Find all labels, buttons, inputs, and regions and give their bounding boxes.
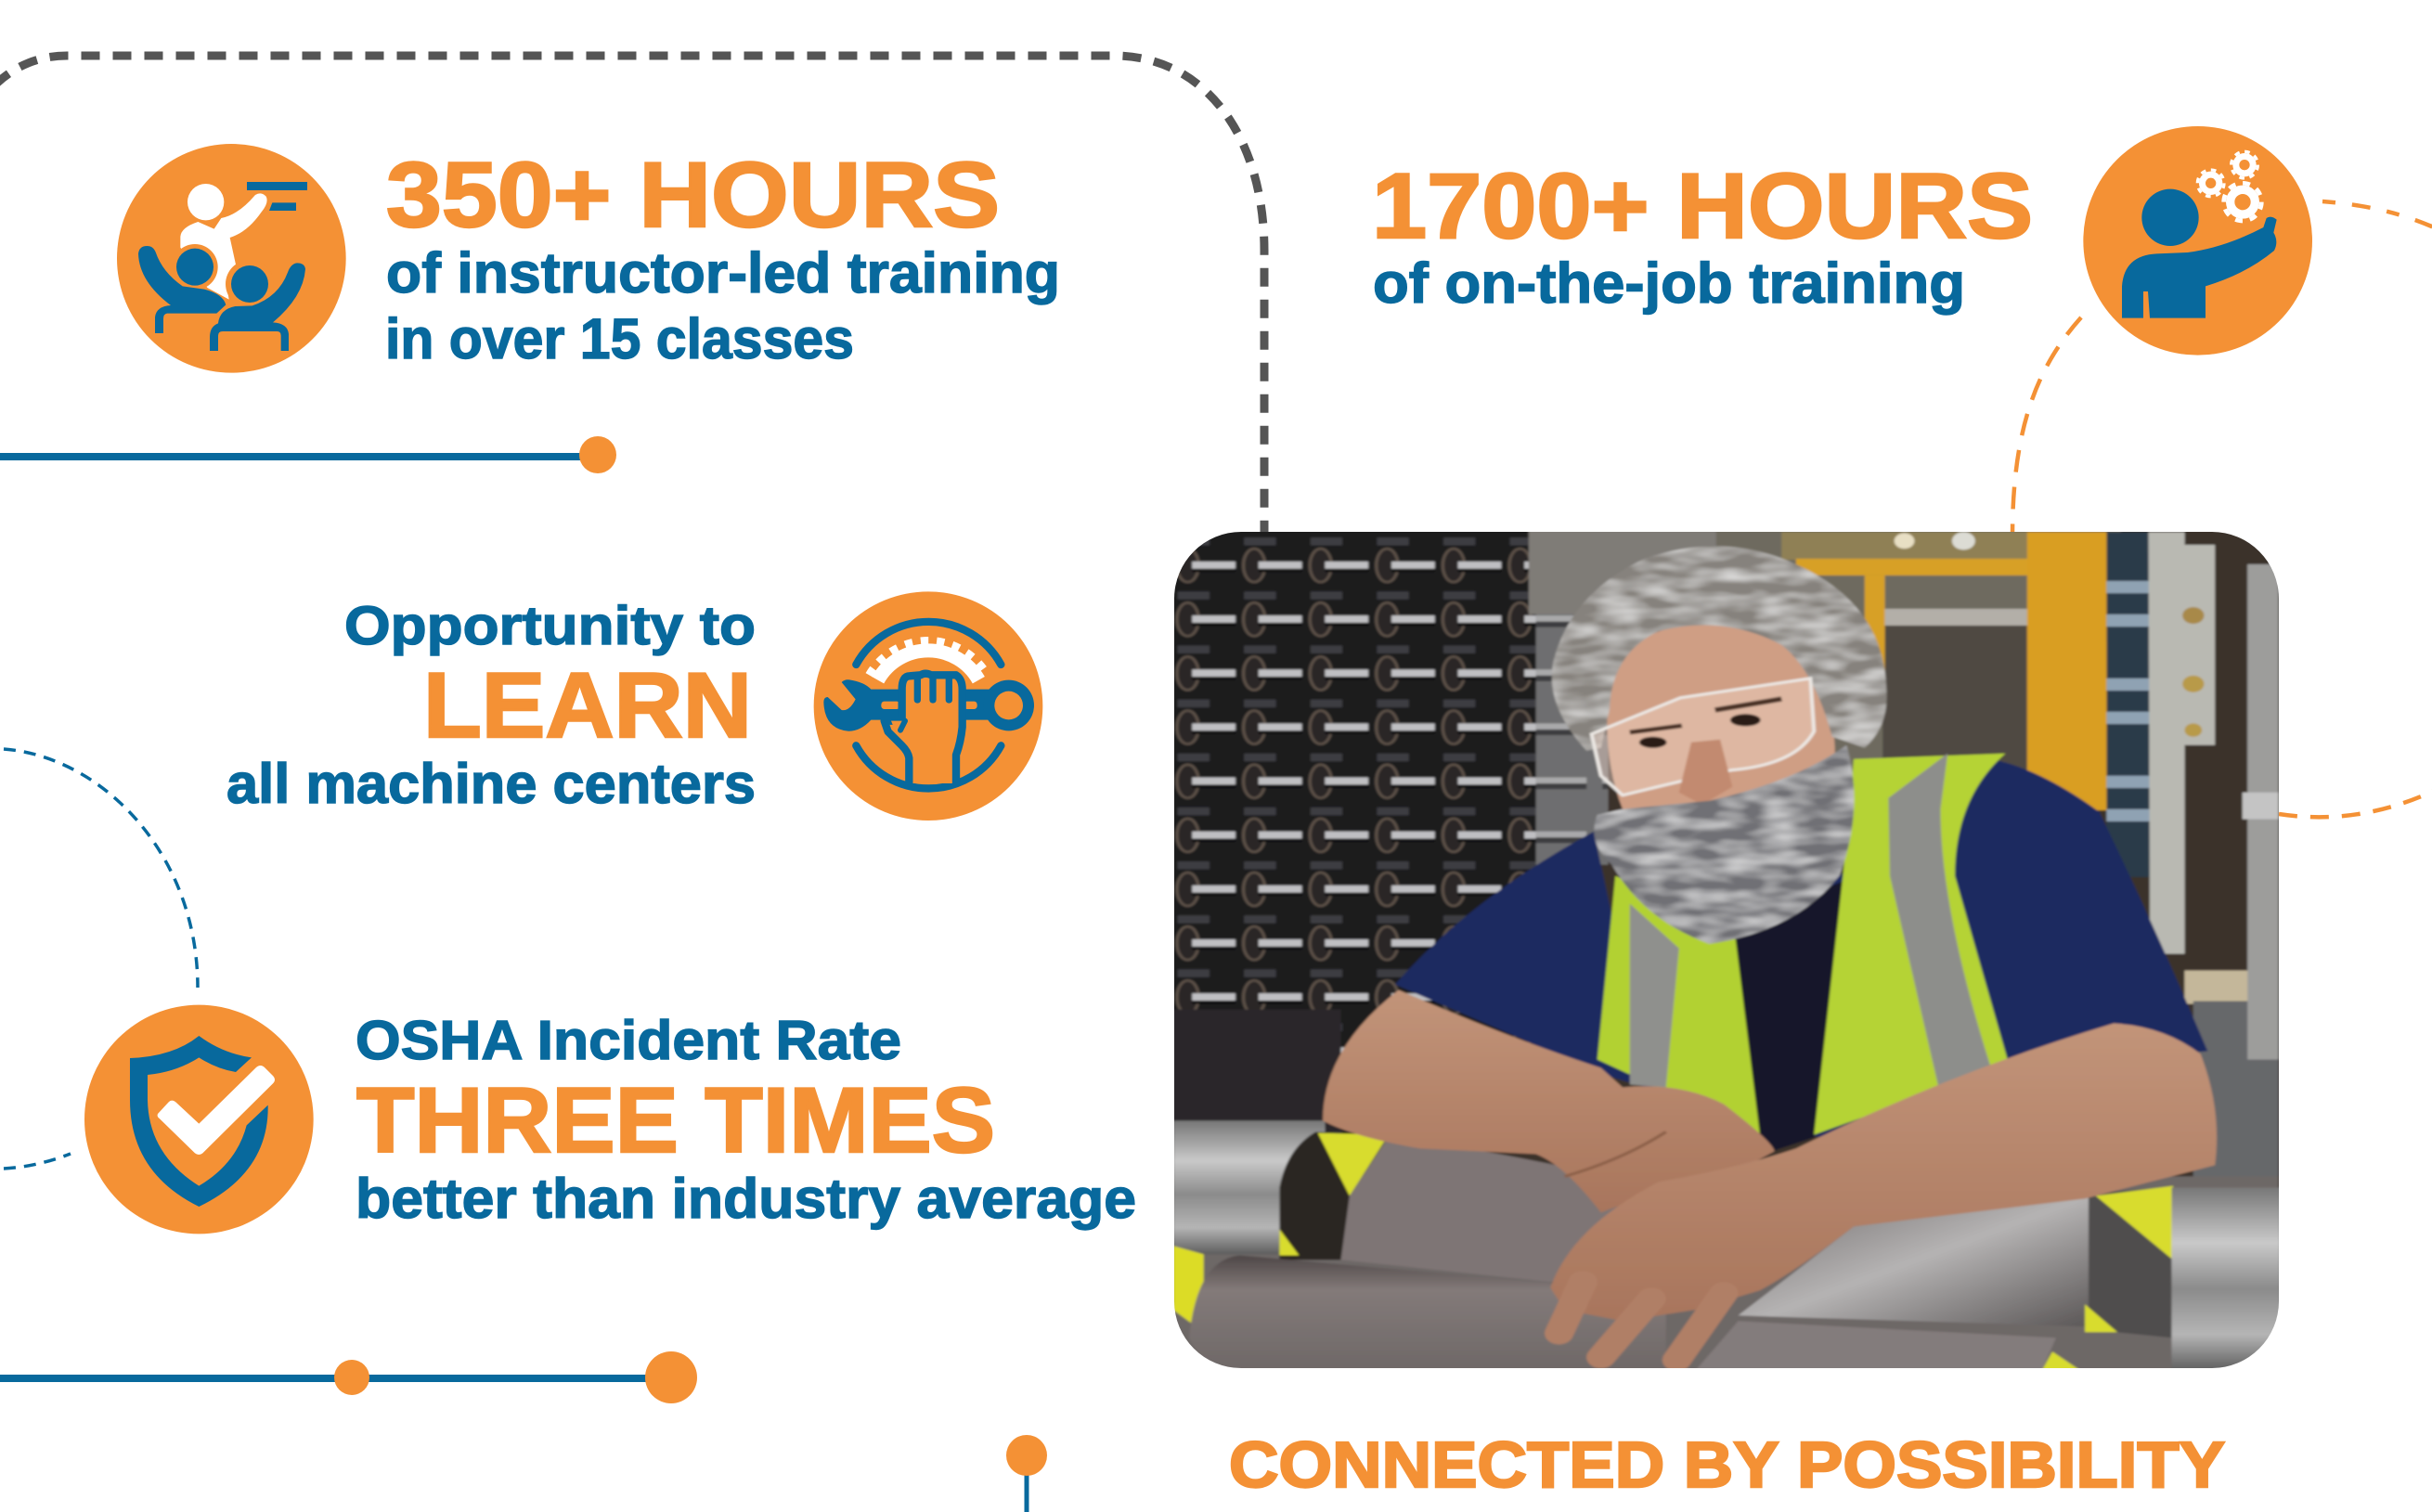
- eyes and brows: [1630, 699, 1781, 748]
- nose: [1679, 740, 1732, 805]
- text: all machine centers: all machine centers: [226, 753, 756, 815]
- machine background: [1174, 532, 2279, 1311]
- shirt: [1395, 756, 2207, 1143]
- text: OSHA Incident Rate: OSHA Incident Rate: [356, 1010, 901, 1071]
- dashed connector: orange arc left of photo: [2012, 317, 2081, 536]
- icon: instructor with raised-hand students: [117, 144, 346, 373]
- heading: 350+ HOURS: 350+ HOURS: [386, 143, 1000, 246]
- text: better than industry average: better than industry average: [356, 1168, 1136, 1230]
- pin connector at bottom: [1006, 1435, 1047, 1512]
- photo: worker in hair net and safety vest leaning on rollers: [1160, 520, 2293, 1392]
- dashed connector: orange arc top right: [2322, 201, 2432, 227]
- dashed connector: blue arc lower left: [4, 1154, 71, 1169]
- face: [1607, 623, 1835, 809]
- arms and hands: [1323, 990, 2217, 1360]
- caption: CONNECTED BY POSSIBILITY: CONNECTED BY POSSIBILITY: [1229, 1428, 2225, 1501]
- dashed connector: blue arc left: [4, 749, 198, 988]
- dashed connector: orange arc right of photo: [2279, 791, 2432, 817]
- icon: shield with check mark: [84, 1005, 314, 1234]
- timeline: top blue line with dot: [0, 436, 616, 473]
- text: in over 15 classes: in over 15 classes: [385, 307, 854, 370]
- rollers and tape: [1173, 1120, 2280, 1371]
- safety goggles: [1592, 678, 1814, 795]
- timeline: lower blue line with two dots: [0, 1351, 697, 1403]
- dashed connector: grey rounded path: [0, 56, 1264, 540]
- icon: hand gripping wrench with gear: [814, 591, 1042, 821]
- text: of instructor-led training: of instructor-led training: [386, 241, 1060, 304]
- vest: [1598, 754, 2009, 1134]
- heading: LEARN: LEARN: [423, 653, 752, 756]
- inner dark shirt: [1734, 882, 1843, 1151]
- heading: 1700+ HOURS: 1700+ HOURS: [1372, 154, 2033, 257]
- icon: person reaching for gears: [2083, 126, 2312, 355]
- heading: THREE TIMES: THREE TIMES: [356, 1068, 995, 1171]
- text: of on-the-job training: of on-the-job training: [1373, 252, 1965, 315]
- hair net: [1552, 546, 1887, 751]
- text: Opportunity to: Opportunity to: [344, 596, 756, 656]
- beard net: [1594, 745, 1854, 944]
